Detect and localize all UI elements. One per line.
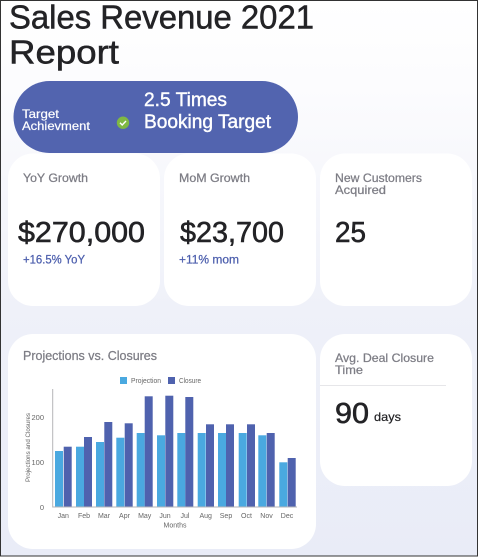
heading xyxy=(335,351,434,377)
bar chart xyxy=(25,389,297,530)
value: 25 xyxy=(335,217,366,249)
month labels: Jan xyxy=(58,513,69,520)
value: days xyxy=(374,410,401,424)
change: +16.5% YoY xyxy=(23,254,85,266)
month labels: Jul xyxy=(181,513,190,520)
heading: MoM Growth xyxy=(179,171,250,185)
month labels: Mar xyxy=(98,513,111,520)
legend xyxy=(120,377,201,385)
heading: Projections vs. Closures xyxy=(23,349,157,363)
month labels: Apr xyxy=(119,513,131,520)
booking target value xyxy=(144,90,272,133)
heading: New Customers xyxy=(335,171,422,185)
x axis title: Months xyxy=(164,522,187,530)
heading: Acquired xyxy=(335,183,386,197)
value: $270,000 xyxy=(18,217,145,249)
month labels: May xyxy=(138,513,152,520)
panel: MoM growth xyxy=(164,154,316,306)
title: Report xyxy=(9,34,119,70)
month labels: Sep xyxy=(220,513,232,520)
heading xyxy=(335,171,422,197)
booking target value: 2.5 Times xyxy=(144,90,227,111)
panel: new customers xyxy=(320,154,472,306)
y axis labels xyxy=(31,413,44,512)
month labels: Oct xyxy=(241,513,252,520)
value: $23,700 xyxy=(180,217,284,249)
month labels: Jun xyxy=(159,513,171,520)
change: +11% mom xyxy=(179,254,239,266)
icon: green check xyxy=(117,116,129,129)
heading: Avg. Deal Closure xyxy=(335,351,434,365)
y axis labels: 0 xyxy=(40,503,44,512)
month labels: Aug xyxy=(199,513,212,520)
value xyxy=(335,398,401,430)
target label: Achievment xyxy=(22,119,91,133)
title xyxy=(9,0,314,70)
y axis labels: 100 xyxy=(31,458,44,467)
y axis title: Projections and Closures xyxy=(25,412,32,482)
booking target value: Booking Target xyxy=(144,112,272,133)
heading: Time xyxy=(335,363,363,377)
y axis labels: 200 xyxy=(31,413,44,422)
value: 90 xyxy=(335,398,369,430)
month labels: Dec xyxy=(281,513,294,520)
month labels: Feb xyxy=(78,513,90,520)
month labels: Nov xyxy=(260,513,273,520)
target label xyxy=(22,107,91,133)
heading: YoY Growth xyxy=(23,171,88,185)
panel: average deal closure time xyxy=(320,334,472,486)
panel: YoY growth xyxy=(8,154,160,306)
month labels xyxy=(58,513,294,520)
panel: projections vs closures xyxy=(8,334,316,549)
legend: Closure xyxy=(179,378,201,385)
legend: Projection xyxy=(131,378,161,385)
target label: Target xyxy=(22,107,60,121)
panel: target achievement banner xyxy=(14,81,298,153)
